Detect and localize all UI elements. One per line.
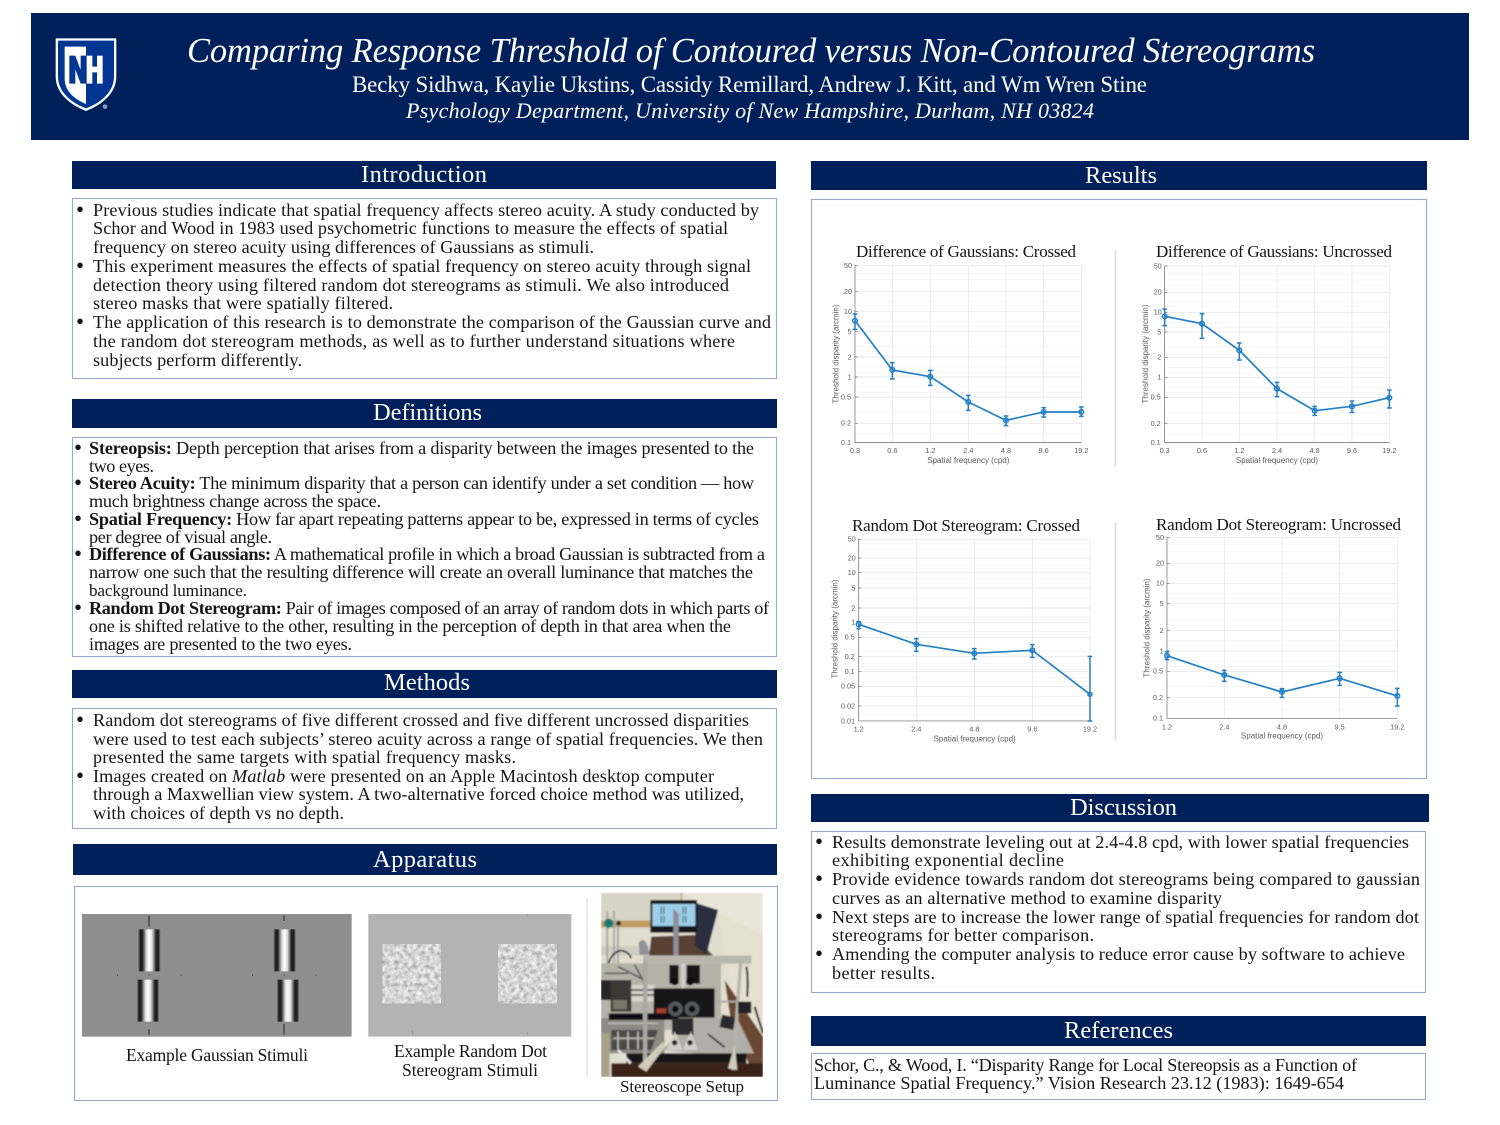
text block: methods bullets: • bbox=[76, 707, 84, 732]
chart: random dot stereogram uncrossed: 2.4 bbox=[1219, 722, 1229, 731]
chart: difference of Gaussians uncrossed bbox=[1141, 242, 1396, 465]
text block: definitions list: one is shifted relative to the other, resulting in the perception of depth in that area when the bbox=[89, 616, 731, 636]
text block: definitions list: • bbox=[74, 470, 82, 495]
text block: methods bullets: with choices of depth vs no depth. bbox=[93, 803, 344, 823]
text block: definitions list: • bbox=[74, 506, 82, 531]
text block: discussion bullets: Results demonstrate leveling out at 2.4-4.8 cpd, with lower spatial frequencies bbox=[832, 832, 1409, 852]
panel: methods bbox=[72, 669, 777, 828]
text block: methods bullets bbox=[76, 707, 763, 823]
text block: discussion bullets: • bbox=[815, 941, 823, 966]
chart: random dot stereogram uncrossed: Threshold disparity (arcmin) bbox=[1142, 578, 1151, 677]
text block: introduction bullets: stereo masks that were spatially filtered. bbox=[93, 293, 393, 313]
heading: introduction: Introduction bbox=[361, 161, 487, 188]
text block: definitions list: background luminance. bbox=[89, 581, 247, 600]
text block: introduction bullets bbox=[76, 197, 771, 370]
text block: definitions list: Difference of Gaussians: A mathematical profile in which a broad Gaussian is subtracted from a bbox=[89, 544, 765, 564]
chart: difference of Gaussians uncrossed: 0.5 bbox=[1151, 393, 1161, 402]
icon: UNH shield logo bbox=[56, 38, 116, 111]
text block: methods bullets: Random dot stereograms of five different crossed and five different uncrossed disparities bbox=[93, 710, 749, 730]
chart: difference of Gaussians crossed: 0.6 bbox=[887, 446, 897, 455]
text block: definitions list: two eyes. bbox=[89, 456, 154, 476]
chart: difference of Gaussians crossed: 2.4 bbox=[963, 446, 973, 455]
chart: random dot stereogram uncrossed: Random Dot Stereogram: Uncrossed bbox=[1156, 515, 1402, 534]
text block: discussion bullets bbox=[815, 829, 1420, 983]
text block: reference entry: Schor, C., & Wood, I. “Disparity Range for Local Stereopsis as a Function of bbox=[814, 1055, 1358, 1075]
chart: random dot stereogram crossed: 10 bbox=[848, 568, 856, 577]
heading: definitions bbox=[72, 399, 777, 428]
chart: random dot stereogram crossed: 0.01 bbox=[841, 716, 855, 725]
chart: difference of Gaussians uncrossed: Threshold disparity (arcmin) bbox=[1141, 304, 1150, 403]
heading: methods bbox=[72, 669, 777, 698]
chart: random dot stereogram uncrossed: 10 bbox=[1156, 579, 1164, 588]
text block: reference entry: Luminance Spatial Frequency.” Vision Research 23.12 (1983): 1649-654 bbox=[814, 1073, 1344, 1094]
chart: random dot stereogram uncrossed: 0.5 bbox=[1153, 667, 1163, 676]
chart: difference of Gaussians crossed: 10 bbox=[844, 307, 852, 316]
chart: random dot stereogram uncrossed: Spatial frequency (cpd) bbox=[1241, 732, 1323, 741]
chart: random dot stereogram crossed: Threshold disparity (arcmin) bbox=[831, 579, 840, 678]
affiliation: Psychology Department, University of New Hampshire, Durham, NH 03824 bbox=[405, 98, 1094, 123]
text block: definitions list: • bbox=[74, 435, 82, 460]
authors: Becky Sidhwa, Kaylie Ukstins, Cassidy Remillard, Andrew J. Kitt, and Wm Wren Stine bbox=[352, 72, 1147, 97]
chart: random dot stereogram crossed: 0.05 bbox=[841, 682, 855, 691]
divider bbox=[586, 898, 588, 1076]
image: example Gaussian stimuli bbox=[82, 914, 352, 1037]
chart: random dot stereogram uncrossed: 19.2 bbox=[1390, 722, 1404, 731]
chart: difference of Gaussians crossed: 0.3 bbox=[850, 446, 860, 455]
chart: difference of Gaussians uncrossed: Spatial frequency (cpd) bbox=[1236, 456, 1318, 465]
chart: random dot stereogram uncrossed: 0.2 bbox=[1153, 693, 1163, 702]
text block: introduction bullets: • bbox=[76, 253, 84, 278]
text block: definitions list: • bbox=[74, 595, 82, 620]
chart: random dot stereogram crossed: 5 bbox=[851, 583, 855, 592]
text block: introduction bullets: frequency on stereo acuity using differences of Gaussians as stimuli. bbox=[93, 237, 594, 257]
text block: definitions list: Random Dot Stereogram: Pair of images composed of an array of random dots in which parts of bbox=[89, 598, 770, 618]
chart: random dot stereogram uncrossed: 0.1 bbox=[1153, 714, 1163, 723]
text block: discussion bullets: Amending the computer analysis to reduce error cause by software to achieve bbox=[832, 944, 1405, 964]
chart: random dot stereogram uncrossed: 1.2 bbox=[1162, 722, 1172, 731]
chart: difference of Gaussians crossed: 50 bbox=[844, 261, 852, 270]
text block: introduction bullets: subjects perform differently. bbox=[93, 350, 302, 370]
chart: difference of Gaussians uncrossed: Difference of Gaussians: Uncrossed bbox=[1156, 242, 1392, 261]
chart: difference of Gaussians crossed: Difference of Gaussians: Crossed bbox=[856, 242, 1076, 261]
text block: discussion bullets: curves as an alternative method to examine disparity bbox=[832, 888, 1223, 908]
text block: definitions list: Stereo Acuity: The minimum disparity that a person can identify under a set condition — how bbox=[89, 473, 755, 493]
caption: random dot stereogram stimuli bbox=[394, 1041, 547, 1080]
chart: difference of Gaussians crossed: 1.2 bbox=[925, 446, 935, 455]
chart: random dot stereogram crossed: 4.8 bbox=[969, 725, 979, 734]
chart: random dot stereogram crossed bbox=[831, 516, 1097, 743]
text block: definitions list: Stereopsis: Depth perception that arises from a disparity between the images presented to the bbox=[89, 438, 754, 458]
caption: stereoscope setup: Stereoscope Setup bbox=[620, 1077, 744, 1096]
chart: random dot stereogram crossed: 50 bbox=[848, 535, 856, 544]
text block: reference entry bbox=[814, 1055, 1358, 1094]
chart: random dot stereogram uncrossed bbox=[1142, 515, 1404, 741]
text block: definitions list: • bbox=[74, 541, 82, 566]
chart: difference of Gaussians crossed: 0.1 bbox=[841, 438, 851, 447]
chart: difference of Gaussians uncrossed: 2.4 bbox=[1272, 446, 1282, 455]
chart: difference of Gaussians crossed: 0.5 bbox=[841, 392, 851, 401]
heading: references: References bbox=[1064, 1017, 1173, 1044]
chart: difference of Gaussians uncrossed: 4.8 bbox=[1310, 446, 1320, 455]
heading: apparatus: Apparatus bbox=[373, 846, 477, 873]
text block: definitions list: narrow one such that the resulting difference will create an overall luminance that matches the bbox=[89, 562, 753, 582]
panel: results bbox=[811, 161, 1427, 778]
chart: random dot stereogram crossed: 1 bbox=[851, 618, 855, 627]
chart: random dot stereogram crossed: 19.2 bbox=[1083, 725, 1097, 734]
chart: difference of Gaussians crossed: 0.2 bbox=[841, 419, 851, 428]
chart: difference of Gaussians uncrossed: 0.3 bbox=[1160, 446, 1170, 455]
chart: random dot stereogram crossed: Random Dot Stereogram: Crossed bbox=[852, 516, 1080, 535]
chart: random dot stereogram crossed: 1.2 bbox=[854, 725, 864, 734]
text block: discussion bullets: • bbox=[815, 829, 823, 854]
heading: results bbox=[811, 161, 1427, 190]
chart: difference of Gaussians uncrossed: 5 bbox=[1157, 327, 1161, 336]
chart: difference of Gaussians uncrossed: 1 bbox=[1157, 373, 1161, 382]
text block: discussion bullets: Provide evidence towards random dot stereograms being compared to gaussian bbox=[832, 869, 1420, 889]
heading: references bbox=[811, 1016, 1426, 1046]
chart: random dot stereogram crossed: 9.6 bbox=[1027, 725, 1037, 734]
text block: definitions list: per degree of visual angle. bbox=[89, 527, 272, 547]
text block: discussion bullets: Next steps are to increase the lower range of spatial frequencies for random dot bbox=[832, 907, 1419, 927]
caption: random dot stereogram stimuli: Example Random Dot bbox=[394, 1041, 547, 1061]
chart: random dot stereogram uncrossed: 9.5 bbox=[1335, 722, 1345, 731]
text block: introduction bullets: the random dot stereogram methods, as well as to further understand situations where bbox=[93, 331, 735, 351]
chart: random dot stereogram crossed: Spatial frequency (cpd) bbox=[934, 734, 1016, 743]
panel: references bbox=[811, 1016, 1426, 1100]
image: stereoscope setup photo bbox=[601, 893, 763, 1077]
heading: methods: Methods bbox=[384, 669, 470, 696]
chart: random dot stereogram uncrossed: 4.8 bbox=[1277, 722, 1287, 731]
chart: difference of Gaussians crossed: 5 bbox=[848, 327, 852, 336]
chart: random dot stereogram crossed: 0.2 bbox=[845, 652, 855, 661]
text block: methods bullets: • bbox=[76, 763, 84, 788]
text block: definitions list: Spatial Frequency: How far apart repeating patterns appear to be, expressed in terms of cycles bbox=[89, 509, 759, 529]
chart: difference of Gaussians crossed: 2 bbox=[848, 352, 852, 361]
chart: difference of Gaussians crossed: 9.6 bbox=[1039, 446, 1049, 455]
text block: introduction bullets: The application of this research is to demonstrate the comparison of the Gaussian curve and bbox=[93, 312, 771, 332]
text block: introduction bullets: detection theory using filtered random dot stereograms as stimuli. We also introduced bbox=[93, 275, 729, 295]
chart: difference of Gaussians crossed: 1 bbox=[848, 372, 852, 381]
chart: difference of Gaussians uncrossed: 20 bbox=[1154, 288, 1162, 297]
chart: difference of Gaussians uncrossed: 0.6 bbox=[1197, 446, 1207, 455]
panel: introduction bbox=[72, 161, 776, 378]
title: Comparing Response Threshold of Contoured versus Non-Contoured Stereograms bbox=[187, 32, 1315, 70]
chart: random dot stereogram crossed: 0.5 bbox=[845, 633, 855, 642]
text block: discussion bullets: stereograms for better comparison. bbox=[832, 925, 1094, 945]
chart: difference of Gaussians crossed: 19.2 bbox=[1074, 446, 1088, 455]
heading: introduction bbox=[72, 161, 776, 189]
text block: discussion bullets: better results. bbox=[832, 963, 935, 983]
text block: methods bullets: were used to test each subjects’ stereo acuity across a range of spatial frequencies. We then bbox=[93, 729, 763, 749]
panel: discussion bbox=[811, 794, 1429, 992]
heading: discussion: Discussion bbox=[1070, 794, 1177, 821]
chart: random dot stereogram crossed: 2 bbox=[851, 603, 855, 612]
text block: definitions list: images are presented to the two eyes. bbox=[89, 634, 352, 654]
chart: difference of Gaussians crossed: 20 bbox=[844, 287, 852, 296]
caption: Gaussian stimuli: Example Gaussian Stimuli bbox=[126, 1045, 308, 1065]
chart: random dot stereogram crossed: 2.4 bbox=[911, 725, 921, 734]
caption: random dot stereogram stimuli: Stereogram Stimuli bbox=[402, 1060, 538, 1080]
chart: random dot stereogram uncrossed: 5 bbox=[1160, 599, 1164, 608]
chart: random dot stereogram uncrossed: 2 bbox=[1160, 626, 1164, 635]
chart: random dot stereogram uncrossed: 1 bbox=[1160, 646, 1164, 655]
heading: apparatus bbox=[73, 844, 777, 875]
text block: methods bullets: presented the same targets with spatial frequency masks. bbox=[93, 747, 516, 767]
text block: discussion bullets: • bbox=[815, 904, 823, 929]
text block: discussion bullets: exhibiting exponential decline bbox=[832, 850, 1064, 870]
chart: difference of Gaussians uncrossed: 10 bbox=[1154, 308, 1162, 317]
panel: apparatus bbox=[73, 844, 778, 1100]
text block: discussion bullets: • bbox=[815, 866, 823, 891]
heading: discussion bbox=[811, 794, 1429, 822]
panel: definitions bbox=[72, 399, 777, 656]
chart: difference of Gaussians crossed: 4.8 bbox=[1001, 446, 1011, 455]
chart: difference of Gaussians uncrossed: 2 bbox=[1157, 353, 1161, 362]
chart: difference of Gaussians uncrossed: 19.2 bbox=[1382, 446, 1396, 455]
chart: random dot stereogram uncrossed: 50 bbox=[1156, 533, 1164, 542]
chart: random dot stereogram uncrossed: 20 bbox=[1156, 559, 1164, 568]
text block: methods bullets: through a Maxwellian view system. A two-alternative forced choice method was utilized, bbox=[93, 784, 744, 804]
text block: introduction bullets: • bbox=[76, 197, 84, 222]
text block: methods bullets: Images created on Matlab were presented on an Apple Macintosh desktop computer bbox=[93, 766, 714, 786]
text block: definitions list bbox=[74, 435, 770, 654]
text block: introduction bullets: Schor and Wood in 1983 used psychometric functions to measure the effects of spatial bbox=[93, 218, 728, 238]
image: example random dot stereogram stimuli bbox=[368, 914, 571, 1037]
text block: definitions list: much brightness change across the space. bbox=[89, 491, 381, 511]
chart: difference of Gaussians uncrossed: 9.6 bbox=[1347, 446, 1357, 455]
text block: introduction bullets: Previous studies indicate that spatial frequency affects stereo acuity. A study conducted by bbox=[93, 200, 760, 220]
heading: results: Results bbox=[1085, 162, 1157, 189]
chart: difference of Gaussians crossed bbox=[831, 242, 1088, 465]
chart: random dot stereogram crossed: 20 bbox=[848, 553, 856, 562]
chart: difference of Gaussians crossed: Threshold disparity (arcmin) bbox=[831, 304, 840, 403]
header banner bbox=[31, 13, 1469, 140]
chart: random dot stereogram crossed: 0.02 bbox=[841, 701, 855, 710]
text block: introduction bullets: This experiment measures the effects of spatial frequency on stereo acuity through signal bbox=[93, 256, 751, 276]
chart: difference of Gaussians uncrossed: 0.2 bbox=[1151, 419, 1161, 428]
chart: difference of Gaussians uncrossed: 0.1 bbox=[1151, 438, 1161, 447]
chart: random dot stereogram crossed: 0.1 bbox=[845, 667, 855, 676]
chart: difference of Gaussians uncrossed: 1.2 bbox=[1234, 446, 1244, 455]
text block: introduction bullets: • bbox=[76, 309, 84, 334]
chart: difference of Gaussians uncrossed: 50 bbox=[1154, 262, 1162, 271]
chart: difference of Gaussians crossed: Spatial frequency (cpd) bbox=[927, 456, 1010, 465]
heading: definitions: Definitions bbox=[373, 399, 482, 426]
